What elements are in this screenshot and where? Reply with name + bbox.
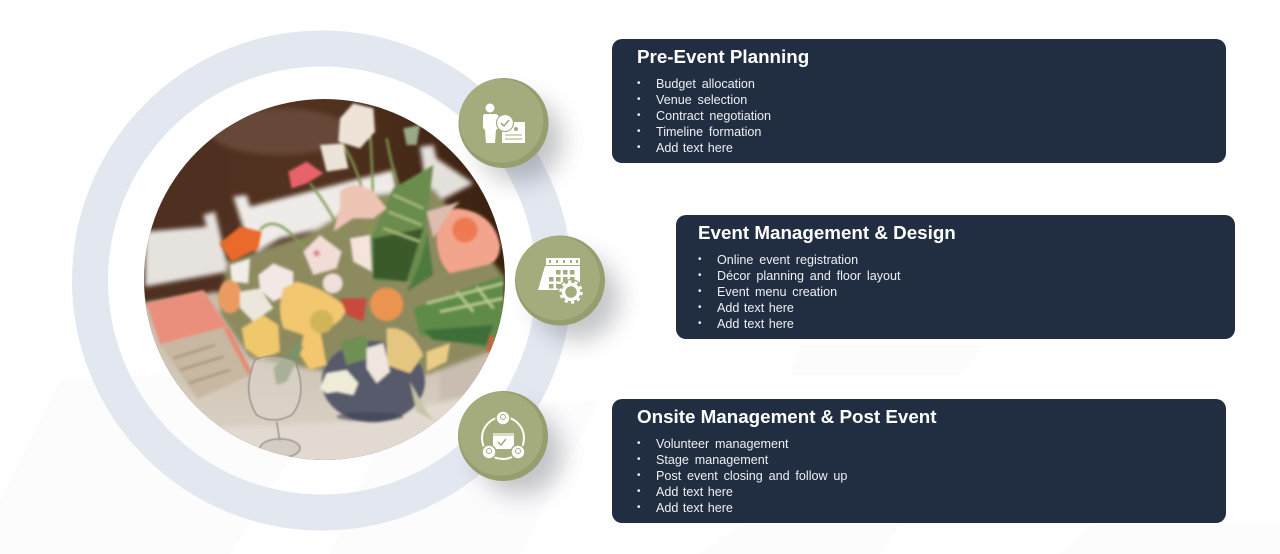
- list: onsite tasks: Post event closing and follow up: [656, 469, 847, 483]
- wine glass: [249, 356, 301, 458]
- panel: pre-event planning: [612, 39, 1226, 163]
- background, ring, photo and icon badges: [72, 30, 630, 530]
- list: onsite tasks: Add text here: [656, 485, 733, 499]
- photo: floral centerpiece on a table: [140, 95, 510, 465]
- badge: event management and design: [515, 236, 619, 340]
- list: pre-event tasks: Add text here: [656, 141, 733, 155]
- list: pre-event tasks: Timeline formation: [656, 125, 761, 139]
- list: onsite tasks: Stage management: [656, 453, 768, 467]
- badge: pre-event planning: [458, 78, 562, 182]
- panel: onsite management and post event: [612, 399, 1226, 523]
- list: event management tasks: Online event registration: [717, 253, 858, 267]
- list: pre-event tasks: Budget allocation: [656, 77, 755, 91]
- heading: onsite management and post event: Onsite Management & Post Event: [637, 406, 937, 427]
- list: onsite tasks: Volunteer management: [656, 437, 789, 451]
- icon: calendar with gear: [538, 258, 584, 305]
- icon: team around calendar: [482, 411, 525, 459]
- list: event management tasks: [698, 253, 901, 331]
- list: pre-event tasks: Contract negotiation: [656, 109, 771, 123]
- list: event management tasks: Event menu creation: [717, 285, 837, 299]
- list: onsite tasks: Add text here: [656, 501, 733, 515]
- list: pre-event tasks: [637, 77, 771, 155]
- badge: onsite management and post event: [458, 391, 562, 495]
- list: pre-event tasks: Venue selection: [656, 93, 747, 107]
- list: onsite tasks: [637, 437, 847, 515]
- list: event management tasks: Décor planning and floor layout: [717, 269, 901, 283]
- decorative ring: [90, 48, 554, 512]
- heading: event management and design: Event Management & Design: [698, 222, 956, 243]
- list: event management tasks: Add text here: [717, 317, 794, 331]
- icon: person with calendar: [483, 104, 525, 143]
- list: event management tasks: Add text here: [717, 301, 794, 315]
- heading: pre-event planning: Pre-Event Planning: [637, 46, 809, 67]
- panel: event management and design: [676, 215, 1235, 339]
